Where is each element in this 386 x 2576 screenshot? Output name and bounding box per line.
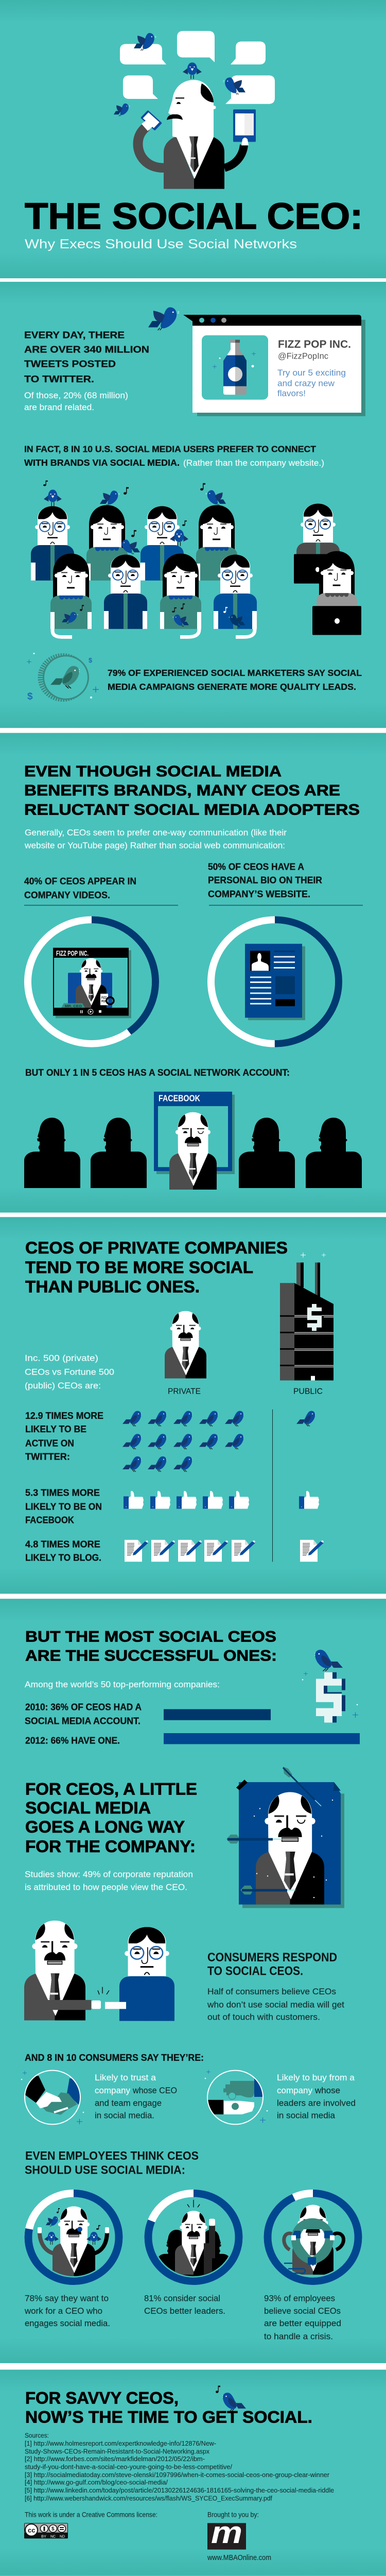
title: THE SOCIAL CEO: xyxy=(25,196,363,237)
icon: coin with bird xyxy=(27,653,99,702)
heading: a little social media: GOES A LONG WAY xyxy=(25,1818,185,1836)
text: likely to buy: in social media xyxy=(277,2111,336,2121)
icon: bird on dollar sign xyxy=(302,1650,358,1723)
bar chart: CEO accounts: SOCIAL MEDIA ACCOUNT. xyxy=(25,1716,141,1726)
icon: money exchange xyxy=(205,2070,268,2124)
text: only 1 in 5: BUT ONLY 1 IN 5 CEOS HAS A SOCIAL NETWORK ACCOUNT: xyxy=(25,1067,290,1078)
text: sources: [4] http://www.go-gulf.com/blog/ceo-social-media/ xyxy=(25,2479,168,2486)
bar chart: CEO accounts: 2010: 36% OF CEOS HAD A xyxy=(25,1702,142,1712)
donut: 93 percent with lifebuoy CEO xyxy=(268,2193,358,2281)
intro text: Generally, CEOs seem to prefer one-way communication (like their xyxy=(25,828,287,837)
video player card: FIZZ xyxy=(101,996,107,999)
text: license: This work is under a Creative Commons license: xyxy=(25,2511,157,2519)
heading: 8 in 10 users: (Rather than the company website.) xyxy=(183,458,324,468)
donut: 81 percent with raised hand CEO xyxy=(148,2193,239,2281)
stat: 40% videos: COMPANY VIDEOS. xyxy=(24,890,110,901)
bar chart: CEO accounts xyxy=(25,1702,360,1745)
stat: 50% bio: 50% OF CEOS HAVE A xyxy=(208,861,304,872)
stat: 79% of marketers: 79% OF EXPERIENCED SOCIAL MARKETERS SAY SOCIAL xyxy=(108,668,362,678)
heading: tweets per day: EVERY DAY, THERE xyxy=(24,330,125,340)
stat: 50% bio xyxy=(208,861,363,906)
text: reputation study xyxy=(25,1870,193,1892)
video player card xyxy=(53,948,131,1018)
stat: 12.9 times twitter xyxy=(25,1410,103,1462)
text: consumers respond: Half of consumers believe CEOs xyxy=(207,1987,336,1996)
panel: successful CEOs xyxy=(21,1628,360,2341)
intro text: (public) CEOs are: xyxy=(25,1381,101,1391)
tweet card: and crazy new xyxy=(277,379,335,388)
text: sources: [2] http://www.forbes.com/sites/markfidelman/2012/05/22/ibm- xyxy=(25,2455,205,2463)
panel: hero illustration xyxy=(114,31,275,189)
stat: 79% of marketers: MEDIA CAMPAIGNS GENERATE MORE QUALITY LEADS. xyxy=(108,682,356,692)
heading: a little social media: SOCIAL MEDIA xyxy=(25,1799,151,1817)
caption: 93 percent: are better equipped xyxy=(264,2318,341,2328)
stat: 12.9 times twitter: ACTIVE ON xyxy=(25,1438,74,1448)
pictogram: blog documents xyxy=(125,1540,324,1562)
text: likely to trust: company xyxy=(95,2086,131,2095)
text: likely to trust: whose CEO xyxy=(132,2086,177,2095)
heading: TEND TO BE MORE SOCIAL xyxy=(25,1258,253,1277)
tweet card: flavors! xyxy=(277,388,306,398)
badge: creative commons xyxy=(24,2523,68,2538)
caption: 93 percent: 93% of employees xyxy=(264,2294,335,2303)
heading: 8 in 10 users: IN FACT, 8 IN 10 U.S. SOCIAL MEDIA USERS PREFER TO CONNECT xyxy=(24,444,316,454)
logo: MBA Online: m xyxy=(211,2515,242,2550)
caption: 78 percent: work for a CEO who xyxy=(24,2306,102,2316)
text: likely to buy: whose xyxy=(314,2086,340,2095)
heading: now's the time: NOW’S THE TIME TO GET SOCIAL. xyxy=(25,2408,312,2426)
video player card: POP xyxy=(101,999,107,1003)
icon: singing bird xyxy=(216,2386,246,2412)
heading: RELUCTANT SOCIAL MEDIA ADOPTERS xyxy=(24,801,360,819)
illustration: crowd connecting via social media xyxy=(31,481,257,637)
donut: 50 percent xyxy=(211,920,339,1044)
text: consumers respond xyxy=(207,1951,344,2022)
text: likely to buy xyxy=(277,2073,356,2121)
caption: 93 percent: believe social CEOs xyxy=(264,2306,341,2316)
heading: CEOS OF PRIVATE COMPANIES xyxy=(25,1239,288,1257)
text: likely to trust: Likely to trust a xyxy=(95,2073,156,2082)
bar chart: CEO accounts: 2012: 66% HAVE ONE. xyxy=(25,1735,120,1745)
heading: now's the time xyxy=(25,2389,312,2426)
heading xyxy=(25,1239,288,1296)
figure: public company building: PUBLIC xyxy=(293,1387,323,1396)
intro text xyxy=(24,828,287,851)
text: consumers respond: TO SOCIAL CEOS. xyxy=(207,1964,303,1978)
badge: creative commons: $ xyxy=(51,2527,55,2532)
panel: reluctant CEOs xyxy=(24,762,363,1190)
heading: 8 in 10 users: WITH BRANDS VIA SOCIAL MEDIA. xyxy=(24,457,180,468)
heading: tweets per day xyxy=(24,330,149,384)
intro text xyxy=(25,1353,114,1391)
heading: now's the time: FOR SAVVY CEOS, xyxy=(25,2389,179,2407)
caption: 81 percent: 81% consider social xyxy=(144,2294,220,2303)
heading: tweets per day: ARE OVER 340 MILLION xyxy=(24,344,149,355)
heading: a little social media: FOR THE COMPANY: xyxy=(25,1837,196,1856)
intro text: Inc. 500 (private) xyxy=(25,1353,98,1363)
icon: birds around the CEO xyxy=(114,33,245,116)
text: brand related share xyxy=(24,391,128,412)
caption: 78 percent: engages social media. xyxy=(25,2318,110,2328)
text: consumers respond: who don’t use social media will get xyxy=(207,2000,344,2009)
heading xyxy=(24,762,360,819)
panel: tweets stat xyxy=(24,307,365,702)
figure: public company building xyxy=(280,1252,334,1396)
stat: 4.8 times blog: 4.8 TIMES MORE xyxy=(25,1539,100,1549)
stat: 5.3 times facebook: FACEBOOK xyxy=(25,1515,74,1526)
heading: tweets per day: TWEETS POSTED xyxy=(24,359,116,369)
text: sources: [5] http://www.linkedin.com/today/post/article/20130226124636-1816165-solving-the-ceo-social-media-riddle xyxy=(25,2486,334,2494)
panel: private vs public xyxy=(25,1239,334,1563)
text: likely to buy: Likely to buy from a xyxy=(277,2073,355,2082)
badge: creative commons: ND xyxy=(60,2534,65,2538)
stat: 5.3 times facebook: LIKELY TO BE ON xyxy=(25,1501,102,1512)
text: brand related share: are brand related. xyxy=(24,402,94,412)
tweet card: Try our 5 exciting xyxy=(277,368,346,378)
text: consumers respond: CONSUMERS RESPOND xyxy=(207,1951,337,1964)
text: consumers respond: out of touch with customers. xyxy=(207,2012,320,2022)
badge: creative commons: BY xyxy=(41,2534,47,2538)
icon: soda bottle xyxy=(213,340,256,395)
icon: darts xyxy=(226,1767,321,1894)
text: sponsor: Brought to you by: xyxy=(207,2511,259,2519)
icon: coin with bird: $ xyxy=(27,691,33,702)
caption: 93 percent: to handle a crisis. xyxy=(264,2332,333,2341)
heading: BENEFITS BRANDS, MANY CEOS ARE xyxy=(24,782,340,799)
tweet card: FIZZ POP INC. xyxy=(278,337,351,350)
caption: 81 percent: CEOs better leaders. xyxy=(144,2306,225,2316)
icon: handshake xyxy=(21,2071,84,2124)
icon: tweeting bird xyxy=(148,307,179,330)
speech bubbles xyxy=(120,31,275,104)
heading: a little social media xyxy=(25,1780,197,1856)
icon: coin with bird: $ xyxy=(89,656,92,664)
heading: THAN PUBLIC ONES. xyxy=(25,1278,200,1296)
stat: 4.8 times blog: LIKELY TO BLOG. xyxy=(25,1552,101,1563)
text: sources: Sources: xyxy=(25,2432,49,2439)
heading: employees: SHOULD USE SOCIAL MEDIA: xyxy=(25,2164,185,2177)
text: sources xyxy=(25,2432,334,2502)
pictogram: CEO silhouettes xyxy=(24,1117,362,1188)
caption: 78 percent xyxy=(24,2294,110,2328)
text: sources: [6] http://www.webershandwick.com/resources/ws/flash/WS_SYCEO_ExecSummary.pdf xyxy=(25,2495,272,2502)
figure: private CEO xyxy=(165,1311,206,1396)
heading: BUT THE MOST SOCIAL CEOS xyxy=(25,1628,276,1645)
caption: 81 percent xyxy=(144,2294,225,2316)
intro text: CEOs vs Fortune 500 xyxy=(25,1367,114,1377)
text: website: www.MBAOnline.com xyxy=(207,2554,271,2562)
pictogram: thumbs up xyxy=(124,1491,319,1509)
facebook CEO card xyxy=(154,1092,235,1190)
text: reputation study: is attributed to how people view the CEO. xyxy=(25,1883,187,1892)
stat: 12.9 times twitter: LIKELY TO BE xyxy=(25,1424,86,1434)
text: sources: Study-Shows-CEOs-Remain-Resistant-to-Social-Networking.aspx xyxy=(25,2448,210,2455)
tweet card xyxy=(183,315,365,416)
text: reputation study: Studies show: 49% of corporate reputation xyxy=(25,1870,193,1879)
heading: tweets per day: TO TWITTER. xyxy=(24,374,94,384)
heading: a little social media: FOR CEOS, A LITTLE xyxy=(25,1780,197,1798)
stat: 50% bio: PERSONAL BIO ON THEIR xyxy=(208,875,322,885)
heading: EVEN THOUGH SOCIAL MEDIA xyxy=(24,762,282,780)
stat: 40% videos: 40% OF CEOS APPEAR IN xyxy=(24,876,136,886)
text: likely to trust: and team engage xyxy=(95,2098,162,2108)
heading: employees: EVEN EMPLOYEES THINK CEOS xyxy=(25,2150,199,2163)
stat: 40% videos xyxy=(24,876,178,906)
donut: 78 percent with singing CEO xyxy=(28,2193,119,2281)
heading xyxy=(25,1628,277,1664)
column divider xyxy=(272,1410,273,1562)
text: sources: [3] http://socialmediatoday.com/steve-olenski/1097996/when-it-comes-social-ceos-one-group-clear-winner xyxy=(25,2471,330,2479)
text: top performers: Among the world’s 50 top-performing companies: xyxy=(25,1680,220,1689)
caption: 93 percent xyxy=(264,2294,341,2341)
donut: 40 percent xyxy=(28,920,155,1044)
stat: 50% bio: COMPANY’S WEBSITE. xyxy=(208,889,310,900)
facebook CEO card: FACEBOOK xyxy=(159,1093,200,1103)
video player card: FIZZ POP INC. xyxy=(56,950,89,957)
tweet card: @FizzPopInc xyxy=(278,351,328,361)
poster: CEO dartboard xyxy=(226,1767,344,1908)
intro text: website or YouTube page) Rather than social web communication: xyxy=(24,841,285,851)
stat: 12.9 times twitter: TWITTER: xyxy=(25,1451,70,1462)
text: likely to trust xyxy=(95,2073,177,2121)
heading: employees xyxy=(25,2150,199,2177)
panel: closing and credits xyxy=(24,2386,334,2562)
stat: 5.3 times facebook: 5.3 TIMES MORE xyxy=(25,1487,100,1498)
text: likely to buy: leaders are involved xyxy=(277,2098,356,2108)
text: sources: [1] http://www.holmesreport.com/expertknowledge-info/12876/New- xyxy=(25,2439,216,2447)
bio page card xyxy=(245,944,305,1020)
illustration: disengaged laptop users xyxy=(294,504,361,635)
figure: private CEO: PRIVATE xyxy=(168,1387,201,1396)
stat: 5.3 times facebook xyxy=(25,1487,102,1526)
stat: 12.9 times twitter: 12.9 TIMES MORE xyxy=(25,1410,103,1421)
stat: 79% of marketers xyxy=(108,668,362,692)
heading: 8 in 10 users xyxy=(24,444,324,468)
illustration: CEO shaking hands with a consumer xyxy=(24,1921,174,2021)
stat: 4.8 times blog xyxy=(25,1539,101,1563)
heading: ARE THE SUCCESSFUL ONES: xyxy=(25,1647,277,1664)
pictogram: twitter birds xyxy=(122,1411,316,1472)
subtitle: Why Execs Should Use Social Networks xyxy=(25,237,297,251)
caption: 78 percent: 78% say they want to xyxy=(25,2294,109,2303)
heading: 8 in 10 consumers: AND 8 IN 10 CONSUMERS SAY THEY’RE: xyxy=(25,2052,204,2063)
badge: creative commons: cc xyxy=(28,2527,35,2534)
text: likely to trust: in social media. xyxy=(95,2111,154,2121)
CEO figure with phone and tablet xyxy=(138,80,256,189)
text: likely to buy: company xyxy=(277,2086,313,2095)
text: brand related share: Of those, 20% (68 million) xyxy=(24,391,128,400)
badge: creative commons: NC xyxy=(50,2534,56,2538)
text: sources: study-if-you-dont-have-a-social-ceo-youre-going-to-be-less-competitive/ xyxy=(25,2463,232,2470)
video player card: MR. CEO xyxy=(65,1005,82,1008)
